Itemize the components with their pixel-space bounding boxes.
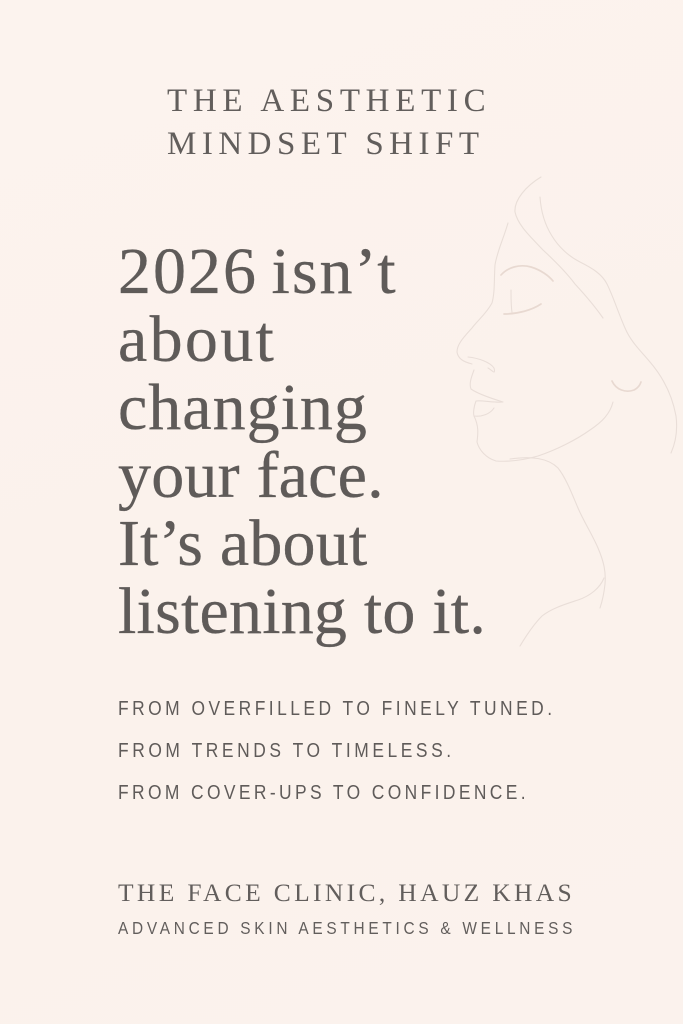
clinic name: THE FACE CLINIC, HAUZ KHAS <box>118 878 575 907</box>
headline: It’s about <box>118 507 367 580</box>
text block: mindset shifts <box>118 698 556 804</box>
shift line 3: FROM COVER-UPS TO CONFIDENCE. <box>118 782 529 804</box>
headline: listening to it. <box>118 575 486 648</box>
headline: about <box>118 303 276 376</box>
title line 1: THE AESTHETIC <box>167 83 491 119</box>
title line 2: MINDSET SHIFT <box>167 126 485 162</box>
headline: 2026 isn’t <box>118 235 398 308</box>
shift line 1: FROM OVERFILLED TO FINELY TUNED. <box>118 698 556 720</box>
clinic tagline: ADVANCED SKIN AESTHETICS & WELLNESS <box>118 918 576 938</box>
headline <box>118 235 486 648</box>
title <box>167 83 491 162</box>
shift line 2: FROM TRENDS TO TIMELESS. <box>118 740 455 762</box>
headline: changing <box>118 371 368 444</box>
headline: your face. <box>118 439 384 512</box>
